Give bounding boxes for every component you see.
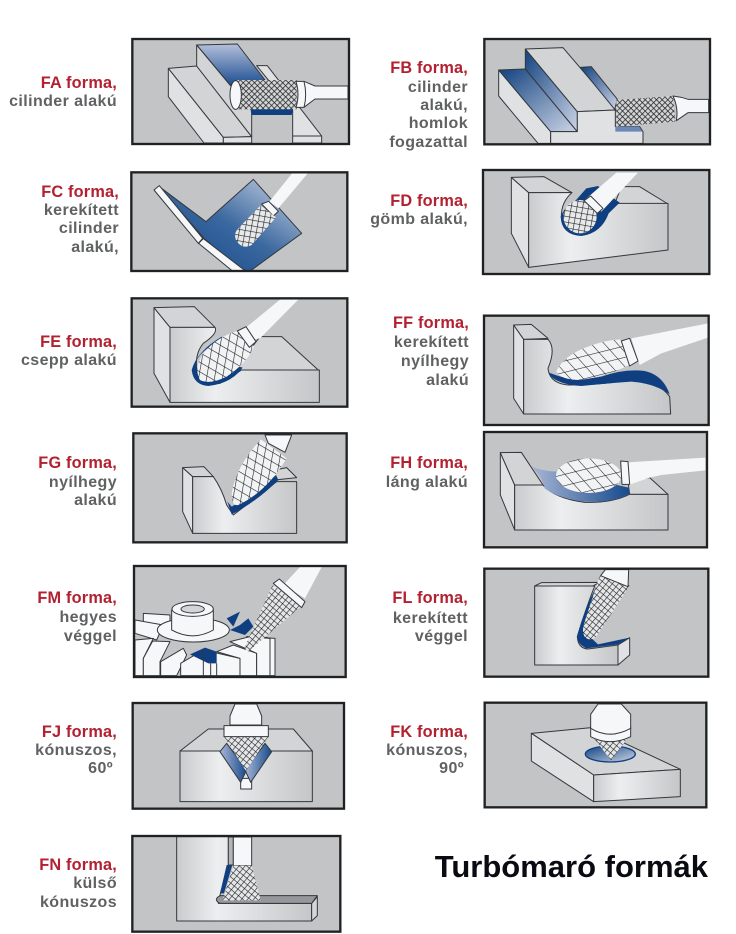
label: FE forma (21, 333, 117, 369)
label: FF forma (393, 314, 469, 389)
label: FF forma: kerekített (394, 334, 469, 351)
label: FD forma: FD forma, (390, 192, 468, 210)
title: Turbómaró formák (435, 849, 709, 884)
label: FK forma: FK forma, (390, 723, 468, 741)
panel: FB illustration (484, 39, 710, 144)
label: FN forma: külső (73, 875, 117, 892)
label: FK forma: kónuszos, (386, 742, 468, 759)
label: FJ forma: FJ forma, (42, 723, 117, 741)
label: FL forma (392, 589, 468, 645)
label: FB forma: alakú, (420, 97, 468, 114)
panel: FA illustration (132, 39, 349, 144)
label: FL forma: FL forma, (392, 589, 468, 607)
label: FF forma: FF forma, (393, 314, 469, 332)
panel: FC illustration (131, 172, 347, 271)
label: FB forma: fogazattal (389, 134, 468, 151)
label: FM forma: véggel (64, 628, 117, 645)
label: FB forma: FB forma, (390, 59, 468, 77)
label: FA forma: FA forma, (41, 74, 117, 92)
label: FG forma: nyílhegy (49, 474, 117, 491)
label: FM forma (37, 589, 117, 645)
label: FK forma: 90º (439, 760, 464, 777)
label: FH forma: láng alakú (386, 474, 468, 491)
label: FG forma: alakú (74, 492, 117, 509)
label: FH forma (386, 454, 468, 491)
panel: FJ illustration (133, 703, 344, 809)
label: FG forma (38, 454, 117, 509)
panel: FH illustration (484, 432, 707, 547)
label: FB forma: cilinder (408, 79, 468, 96)
label: FD forma (370, 192, 468, 228)
panel: FD illustration (483, 170, 709, 274)
label: FD forma: gömb alakú, (370, 211, 468, 228)
label: FE forma: csepp alakú (21, 352, 117, 369)
label: FB forma (389, 59, 468, 151)
label: FG forma: FG forma, (38, 454, 117, 472)
panel: FG illustration (133, 433, 347, 542)
label: FA forma: cilinder alakú (9, 93, 117, 110)
label: FL forma: véggel (415, 628, 468, 645)
label: FK forma (386, 723, 468, 777)
label: FN forma: kónuszos (40, 894, 117, 911)
label: FC forma: alakú, (71, 239, 119, 256)
label: FJ forma (35, 723, 117, 777)
label: FC forma: FC forma, (41, 183, 119, 201)
label: FN forma (39, 856, 117, 911)
panel: FE illustration (132, 298, 347, 407)
panel: FM illustration (134, 566, 346, 677)
label: FM forma: FM forma, (37, 589, 117, 607)
label: FB forma: homlok (409, 115, 468, 132)
label: FC forma: cilinder (59, 220, 119, 237)
panel: FL illustration (484, 569, 708, 677)
label: FJ forma: kónuszos, (35, 742, 117, 759)
label: FF forma: nyílhegy (401, 353, 469, 370)
label: FJ forma: 60º (88, 760, 113, 777)
label: FE forma: FE forma, (40, 333, 117, 351)
panel: FN illustration (132, 836, 340, 932)
panel: FK illustration (485, 703, 706, 807)
label: FL forma: kerekített (393, 610, 468, 627)
label: FN forma: FN forma, (39, 856, 117, 874)
label: FC forma: kerekített (44, 202, 119, 219)
label: FC forma (41, 183, 119, 256)
label: FM forma: hegyes (59, 609, 117, 626)
label: FH forma: FH forma, (390, 454, 468, 472)
label: FF forma: alakú (426, 372, 469, 389)
label: FA forma (9, 74, 117, 110)
panel: FF illustration (484, 316, 709, 425)
